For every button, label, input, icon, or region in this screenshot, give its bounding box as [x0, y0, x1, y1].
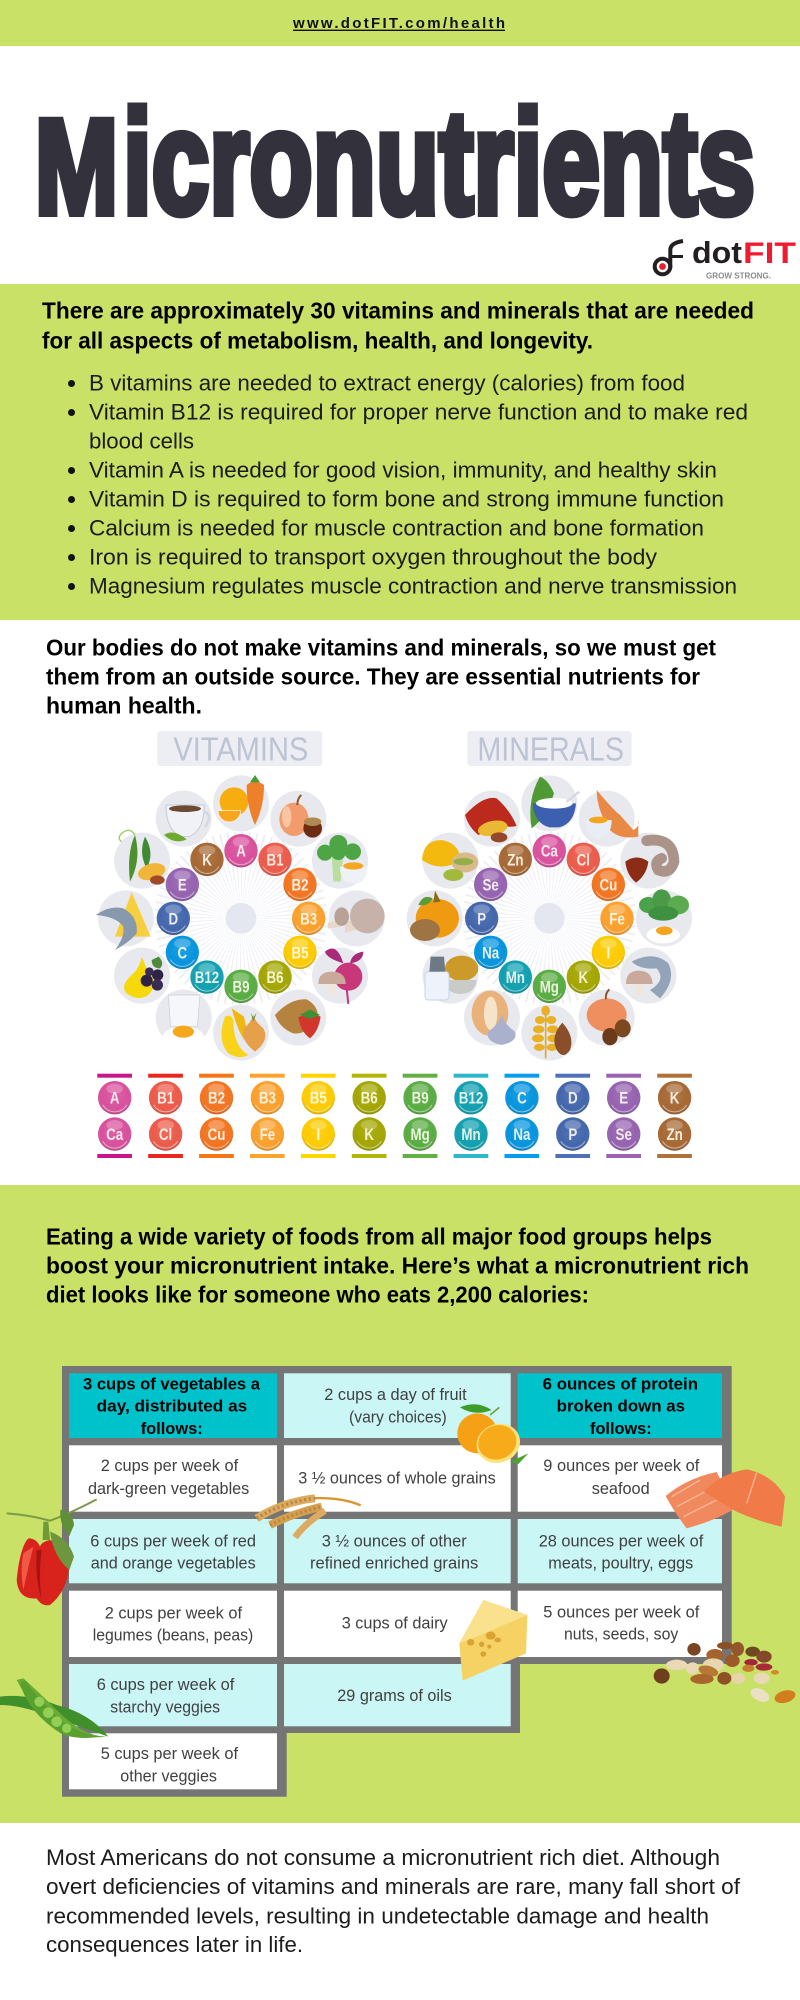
- text: outside source paragraph: human health.: [46, 692, 202, 718]
- logo: dotFIT: GROW STRONG.: [706, 270, 771, 280]
- mineral bubbles: Se: [483, 876, 499, 895]
- legend bubbles row 1: B3: [259, 1089, 276, 1108]
- vitamin bubbles: [157, 834, 325, 1003]
- column: vegetables: [69, 1373, 277, 1789]
- column: protein: [518, 1373, 722, 1657]
- bullet list: Vitamin A is needed for good vision, immunity, and healthy skin: [89, 458, 717, 482]
- text: outside source paragraph: Our bodies do not make vitamins and minerals, so we must get: [46, 634, 716, 660]
- legend bubbles row 1: B12: [459, 1089, 483, 1108]
- icon: beet and mushroom: [318, 949, 363, 1004]
- vitamin bubbles: A: [236, 842, 246, 861]
- food discs: [407, 775, 692, 1061]
- mineral bubbles: P: [477, 910, 486, 929]
- legend bubbles row 1: B5: [310, 1089, 327, 1108]
- icon: cup of tea: [164, 805, 209, 841]
- icon: walnut and strawberry: [275, 999, 321, 1038]
- legend bubbles row 2: Cu: [208, 1126, 225, 1144]
- vitamin bubbles: B1: [266, 851, 284, 870]
- icon: fish and egg: [585, 790, 639, 839]
- legend bubbles row 1: C: [517, 1089, 527, 1108]
- icon: peach and coffee beans: [587, 989, 631, 1045]
- column: fruit, grains, dairy, oils: (vary choices): [349, 1408, 447, 1427]
- icon: peas and rice bowl: [530, 777, 579, 828]
- title: M: [35, 93, 118, 242]
- legend bubbles row 1: B2: [208, 1089, 225, 1108]
- column: fruit, grains, dairy, oils: 3 ½ ounces of whole grains: [298, 1468, 496, 1487]
- column: protein: nuts, seeds, soy: [564, 1624, 679, 1643]
- mineral bubbles: [465, 834, 634, 1003]
- mineral bubbles: Mg: [540, 978, 559, 997]
- diet heading: Eating a wide variety of foods from all major food groups helps: [46, 1224, 712, 1250]
- icon: nuts: [654, 1642, 797, 1705]
- logo symbol: [655, 241, 683, 274]
- diet heading: [46, 1224, 749, 1308]
- vitamin bubbles: C: [178, 944, 187, 963]
- diet heading: diet looks like for someone who eats 2,200 calories:: [46, 1282, 589, 1308]
- vitamin bubbles: D: [169, 910, 178, 929]
- column: fruit, grains, dairy, oils: refined enriched grains: [310, 1553, 478, 1572]
- column: protein: follows:: [590, 1419, 652, 1438]
- vitamin bubbles: K: [202, 851, 212, 870]
- icon: banana and onion: [222, 1008, 265, 1057]
- icon: peas and peanut: [119, 830, 167, 885]
- icon: pumpkin and walnut: [410, 891, 459, 941]
- icon: wheat: [257, 1498, 361, 1537]
- bullet list: Magnesium regulates muscle contraction and nerve transmission: [89, 574, 737, 598]
- icon: pear and blackcurrants: [124, 957, 163, 998]
- column: protein: 28 ounces per week of: [539, 1532, 704, 1551]
- table: daily food amounts: [62, 1366, 732, 1797]
- legend bubbles row 2: Se: [616, 1126, 632, 1144]
- icon: almond and garlic: [472, 991, 516, 1045]
- legend bubbles row 1: A: [110, 1089, 120, 1108]
- legend bubbles row 2: Zn: [666, 1126, 683, 1144]
- vitamins label: VITAMINS: [173, 732, 308, 769]
- icon: salmon: [666, 1469, 785, 1528]
- legend bubbles row 2: Cl: [159, 1126, 172, 1144]
- legend bubbles row 1: K: [670, 1089, 679, 1108]
- legend bubbles row 2: Fe: [260, 1126, 275, 1144]
- legend bubbles row 1: E: [619, 1089, 628, 1108]
- bullet list: Iron is required to transport oxygen throughout the body: [89, 544, 657, 570]
- legend bars: [97, 1074, 692, 1158]
- text: closing paragraph: recommended levels, resulting in undetectable damage and health: [46, 1903, 709, 1928]
- panel: micronutrient rich diet: [0, 1185, 800, 1823]
- column: fruit, grains, dairy, oils: 29 grams of oils: [337, 1686, 452, 1705]
- icon: bun and pistachio: [422, 840, 478, 881]
- legend bubbles row 2: [98, 1117, 691, 1151]
- bullet list: Calcium is needed for muscle contraction and bone formation: [89, 516, 704, 540]
- bullet list: B vitamins are needed to extract energy (calories) from food: [89, 370, 685, 396]
- mineral bubbles: Mn: [506, 969, 525, 987]
- icon: cheese and fish: [96, 892, 151, 950]
- bullet list: [68, 370, 748, 598]
- column: vegetables: 5 cups per week of: [101, 1744, 238, 1763]
- diet heading: boost your micronutrient intake. Here’s what a micronutrient rich: [46, 1252, 749, 1278]
- mineral bubbles: Fe: [609, 910, 625, 929]
- text: outside source paragraph: [46, 634, 716, 718]
- logo: dotFIT: [655, 235, 796, 280]
- text: closing paragraph: [46, 1845, 741, 1957]
- text: closing paragraph: Most Americans do not consume a micronutrient rich diet. Although: [46, 1845, 720, 1870]
- bullet list: Vitamin D is required to form bone and strong immune function: [89, 486, 724, 512]
- legend bubbles row 2: Ca: [106, 1126, 124, 1144]
- text: closing paragraph: consequences later in life.: [46, 1932, 303, 1957]
- intro heading: for all aspects of metabolism, health, and longevity.: [42, 328, 593, 354]
- website link: www.dotFIT.com/health: [292, 15, 505, 32]
- icon: meat and peanut: [465, 798, 517, 842]
- icon: peach and hazelnut: [279, 795, 322, 838]
- mineral bubbles: I: [606, 944, 610, 963]
- vitamin bubbles: B6: [266, 969, 284, 987]
- mineral bubbles: Zn: [507, 851, 523, 870]
- column: vegetables: other veggies: [120, 1766, 217, 1785]
- icon: fish and mushroom: [626, 956, 671, 998]
- column: vegetables: 6 cups per week of: [97, 1675, 235, 1694]
- bullet list: blood cells: [89, 428, 194, 454]
- column: vegetables: dark-green vegetables: [88, 1479, 249, 1498]
- column: fruit, grains, dairy, oils: 3 cups of dairy: [342, 1613, 448, 1632]
- column: vegetables: legumes (beans, peas): [93, 1626, 253, 1645]
- minerals label: MINERALS: [477, 732, 624, 769]
- column: protein: broken down as: [557, 1396, 685, 1415]
- column: vegetables: and orange vegetables: [91, 1553, 256, 1572]
- legend bubbles row 2: I: [316, 1126, 320, 1144]
- legend bubbles row 1: D: [568, 1089, 578, 1108]
- legend: vitamin and mineral pairs: [97, 1074, 692, 1158]
- legend bubbles row 2: Mn: [461, 1126, 481, 1144]
- text: closing paragraph: overt deficiencies of vitamins and minerals are rare, many fall short of: [46, 1874, 741, 1899]
- icon: leafy greens and egg: [639, 889, 689, 943]
- legend bubbles row 2: P: [568, 1126, 577, 1144]
- chart: vitamins wheel: [96, 731, 385, 1061]
- legend bubbles row 1: B6: [361, 1089, 378, 1108]
- icon: cheese: [459, 1600, 527, 1681]
- column: protein: 6 ounces of protein: [543, 1374, 698, 1393]
- column: vegetables: 3 cups of vegetables a: [83, 1374, 261, 1393]
- mineral bubbles: Ca: [541, 842, 558, 861]
- column: fruit, grains, dairy, oils: [284, 1373, 511, 1726]
- column: vegetables: 2 cups per week of: [105, 1603, 242, 1622]
- vitamin bubbles: B5: [291, 944, 309, 963]
- column: protein: seafood: [592, 1479, 650, 1498]
- column: vegetables: follows:: [141, 1419, 203, 1438]
- legend bubbles row 2: Na: [513, 1126, 531, 1144]
- column: fruit, grains, dairy, oils: 3 ½ ounces of other: [322, 1532, 467, 1551]
- chart: minerals wheel: [407, 731, 692, 1061]
- icon: mushrooms: [328, 899, 385, 933]
- mineral bubbles: Cu: [599, 876, 617, 895]
- icon: orange and carrot: [218, 775, 264, 825]
- icon: salt shaker and bowl: [425, 956, 478, 1000]
- vitamin bubbles: B2: [291, 876, 309, 895]
- icon: pea pods: [0, 1678, 108, 1738]
- top band: [0, 0, 800, 46]
- table frame: [62, 1366, 732, 1797]
- text: outside source paragraph: them from an outside source. They are essential nutrients for: [46, 664, 700, 690]
- intro heading: There are approximately 30 vitamins and minerals that are needed: [42, 298, 754, 324]
- column: vegetables: starchy veggies: [110, 1697, 220, 1716]
- column: vegetables: day, distributed as: [97, 1396, 247, 1415]
- column: protein: meats, poultry, eggs: [548, 1553, 693, 1572]
- mineral bubbles: Na: [482, 944, 500, 963]
- vitamin bubbles: E: [178, 876, 187, 895]
- food discs: [98, 775, 385, 1061]
- legend bubbles row 2: K: [364, 1126, 374, 1144]
- legend bubbles row 1: B9: [412, 1089, 429, 1108]
- icon: red pepper: [7, 1499, 97, 1605]
- bullet list: Vitamin B12 is required for proper nerve function and to make red: [89, 400, 748, 424]
- rays and hub: [506, 875, 593, 962]
- legend bubbles row 1: [98, 1081, 691, 1114]
- mineral bubbles: K: [579, 969, 588, 987]
- legend bubbles row 2: Mg: [410, 1126, 430, 1144]
- icon: octopus and hazelnut: [625, 840, 674, 883]
- panel: vitamins and minerals facts: [0, 284, 800, 620]
- rays and hub: [198, 875, 284, 962]
- column: vegetables: 2 cups per week of: [101, 1456, 239, 1475]
- legend bubbles row 1: B1: [157, 1089, 174, 1108]
- logo: dotFIT: FIT: [743, 237, 796, 270]
- vitamin bubbles: B9: [232, 978, 250, 997]
- icon: wheat and almond: [532, 1006, 571, 1058]
- icon: orange: [457, 1404, 528, 1469]
- column: fruit, grains, dairy, oils: 2 cups a day of fruit: [324, 1385, 467, 1404]
- vitamin bubbles: B12: [195, 969, 219, 987]
- icon: glass of milk and egg: [163, 995, 204, 1047]
- intro heading: [42, 298, 754, 354]
- mineral bubbles: Cl: [577, 851, 590, 870]
- column: vegetables: 6 cups per week of red: [90, 1532, 256, 1551]
- logo: dotFIT: dot: [692, 235, 742, 270]
- column: protein: 5 ounces per week of: [543, 1602, 700, 1621]
- vitamin bubbles: B3: [300, 910, 317, 929]
- column: protein: 9 ounces per week of: [543, 1456, 700, 1475]
- icon: broccoli and egg: [317, 835, 367, 884]
